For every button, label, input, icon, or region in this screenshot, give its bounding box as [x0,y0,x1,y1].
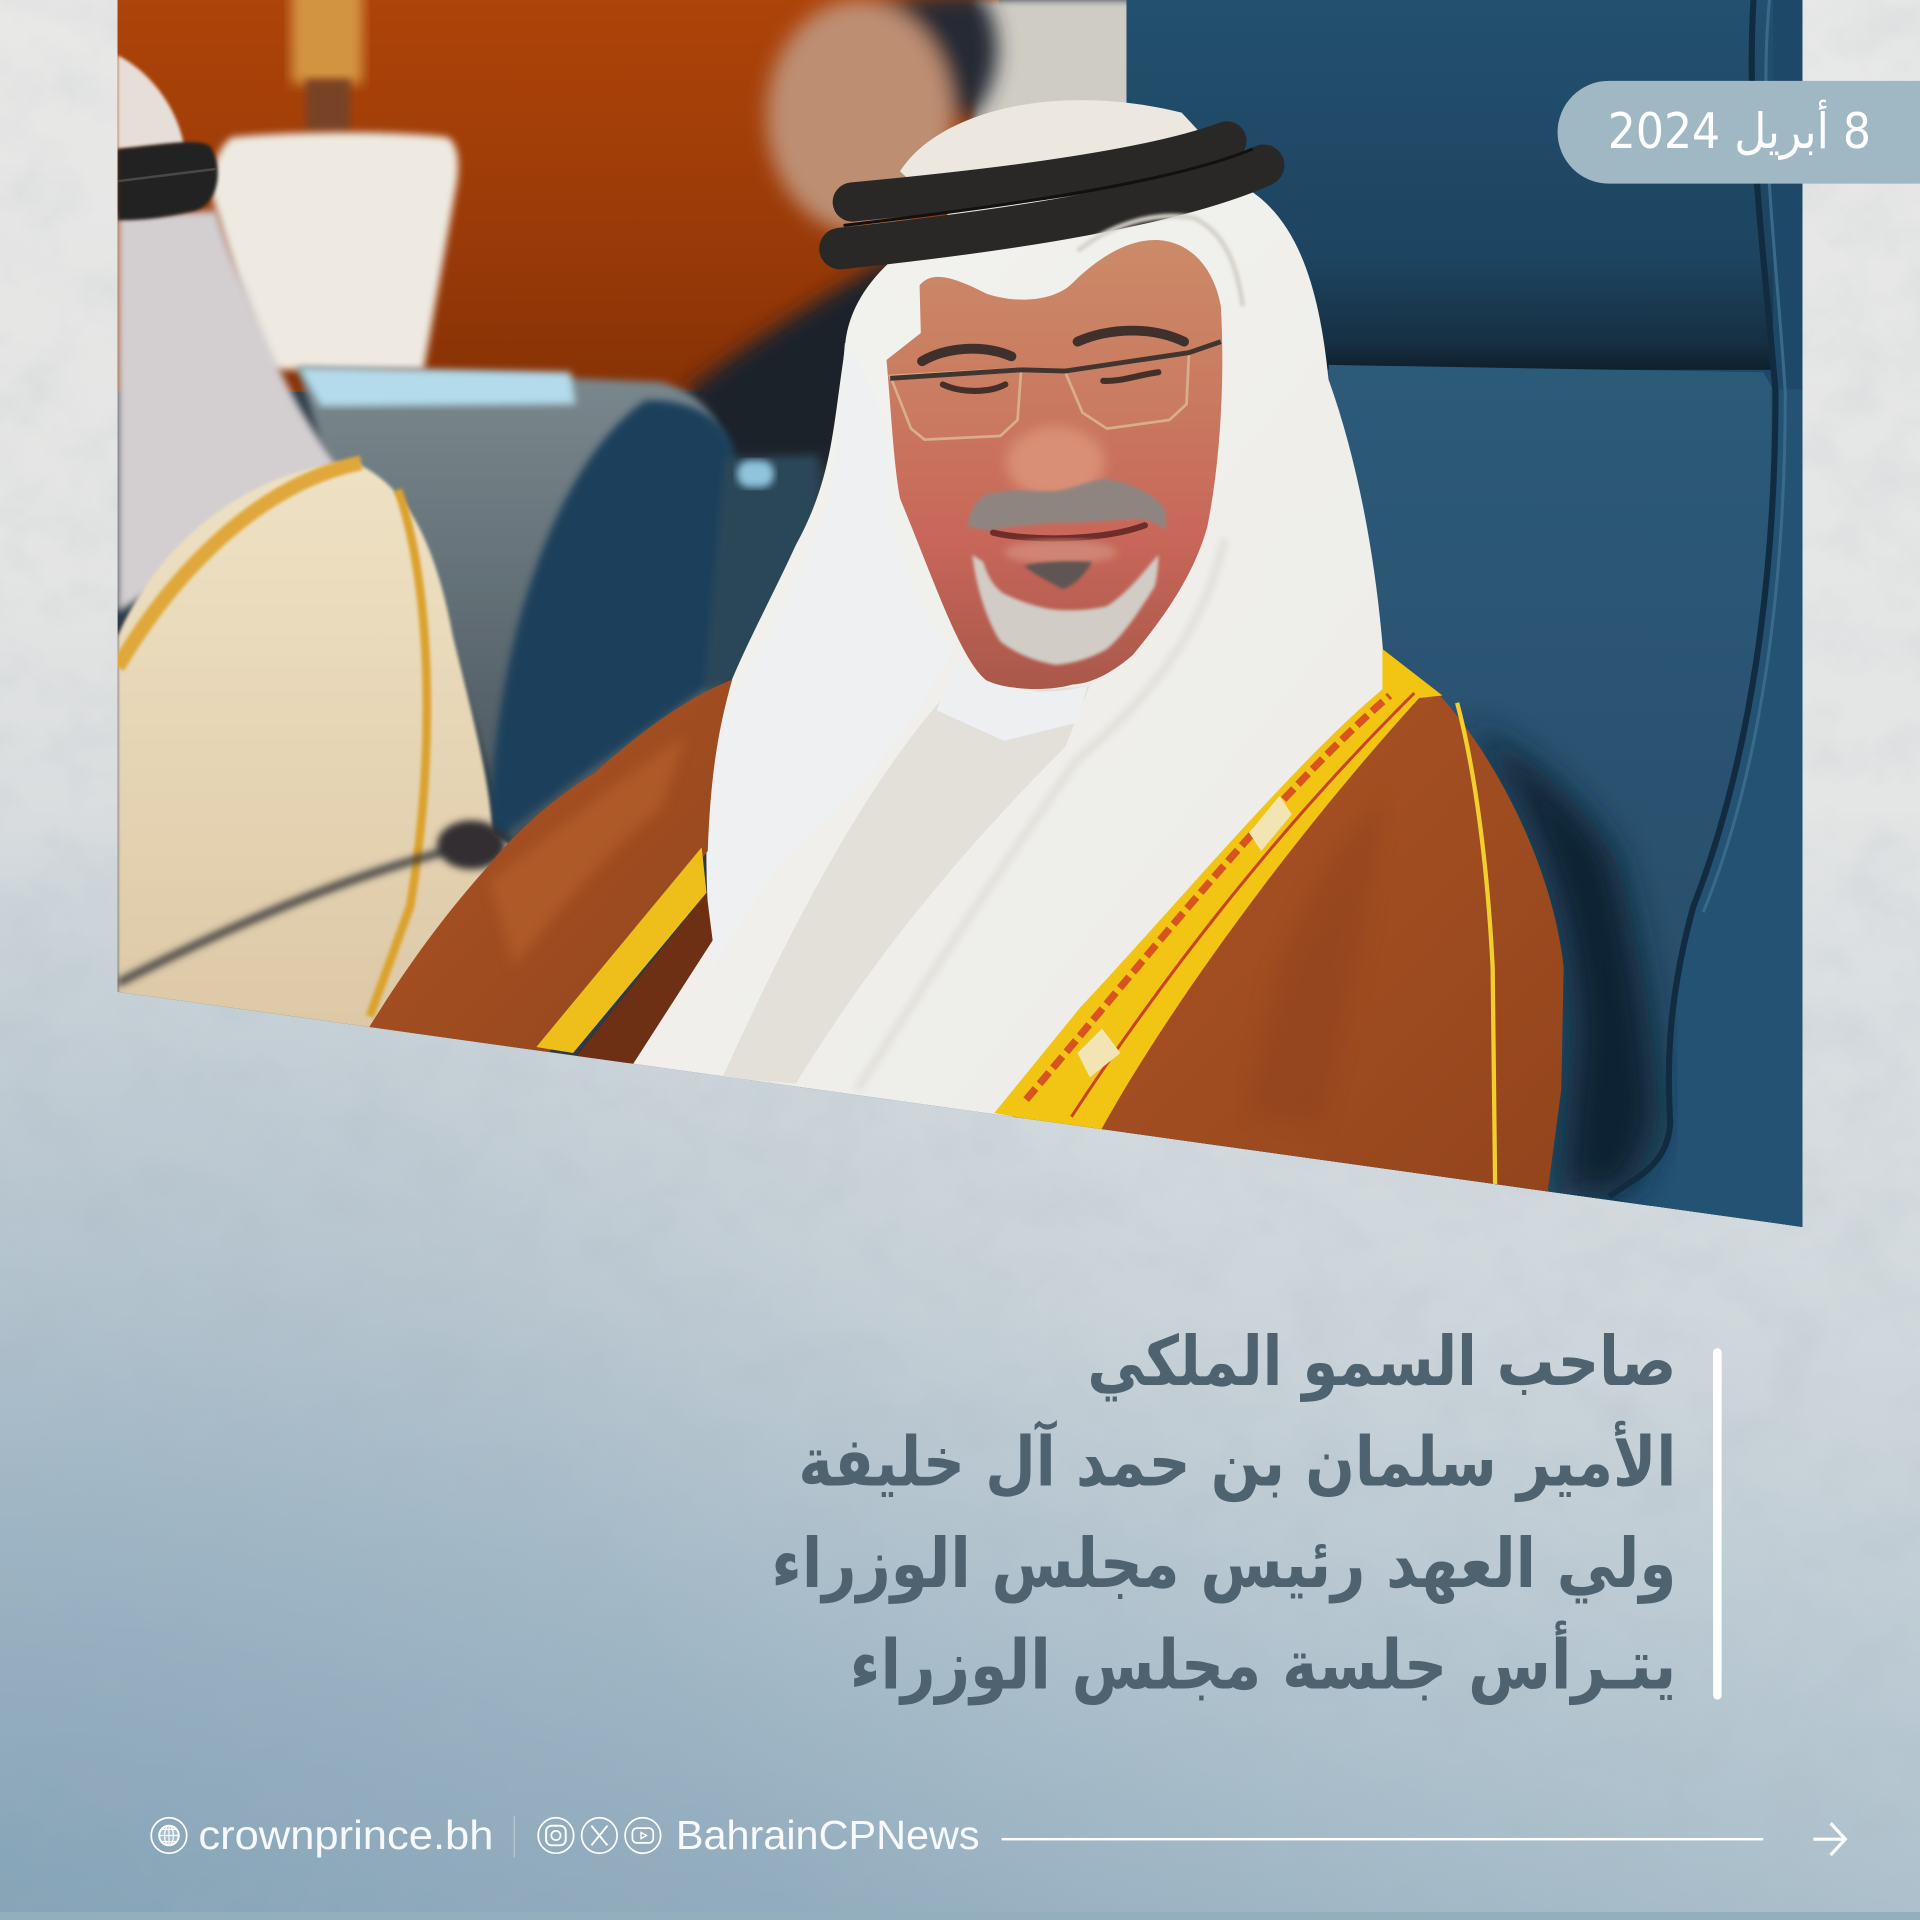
blurred person in background [686,0,997,465]
date text: 8 أبريل 2024 [1608,99,1871,160]
grey moustache [967,479,1166,530]
blurred lamp stem [291,0,362,131]
right cloak [1084,694,1564,1200]
headline line 1: صاحب السمو الملكي [1087,1322,1676,1402]
face [887,216,1243,689]
gold embroidered trim [536,649,1495,1184]
icon: arrow [1813,1823,1845,1855]
icon: instagram [538,1818,574,1853]
headline line 3: ولي العهد رئيس مجلس الوزراء [771,1524,1676,1604]
shirt panel with fold shading [722,686,1090,1084]
headline line 2: الأمير سلمان بن حمد آل خليفة [798,1419,1676,1502]
website text: crownprince.bh [198,1812,493,1858]
yellow edging line [1457,703,1495,1184]
ghutra fold shade above forehead [1078,216,1243,306]
shirt collar [937,661,1087,741]
soul patch [1024,561,1092,589]
brown bisht cloak [367,680,1564,1200]
white thobe and ghutra [618,190,1386,1127]
eyes [943,372,1158,391]
man on left: headdress and robe [118,55,527,1041]
photo: crown prince seated in council chair [118,0,1802,1227]
black agal headband [840,141,1264,249]
photo backdrop: orange wall [118,0,999,392]
footer [151,1812,1845,1858]
headdress cap [900,100,1231,233]
left gold trim [536,847,707,1053]
long rule [1002,1838,1763,1840]
hanging left ghutra panel [843,343,846,362]
blue seat backrest on right [1127,0,1802,1227]
social handle text: BahrainCPNews [676,1812,980,1858]
glasses [890,353,1189,440]
icon: X [582,1818,617,1853]
right ghutra fold shadow [857,539,1224,1090]
date pill [1558,81,1920,184]
gold cream diamonds [1078,796,1292,1078]
white beard [972,555,1158,665]
background chair on left [298,367,818,857]
headline line 4: يتـرأس جلسة مجلس الوزراء [850,1621,1676,1706]
left cloak [367,680,732,1065]
white vertical accent bar [1713,1348,1722,1700]
nose [1007,426,1104,500]
lower lip [1004,540,1117,564]
eyebrows [922,331,1184,361]
photo backdrop: pale panel [968,0,1126,120]
smile [993,525,1145,538]
icon: globe [151,1818,187,1853]
microphone [118,820,506,983]
icon: youtube [625,1818,661,1853]
left cloak inner shadow [569,893,713,1068]
white cup shape [208,133,458,370]
divider [514,1816,515,1858]
headline [771,1322,1676,1706]
